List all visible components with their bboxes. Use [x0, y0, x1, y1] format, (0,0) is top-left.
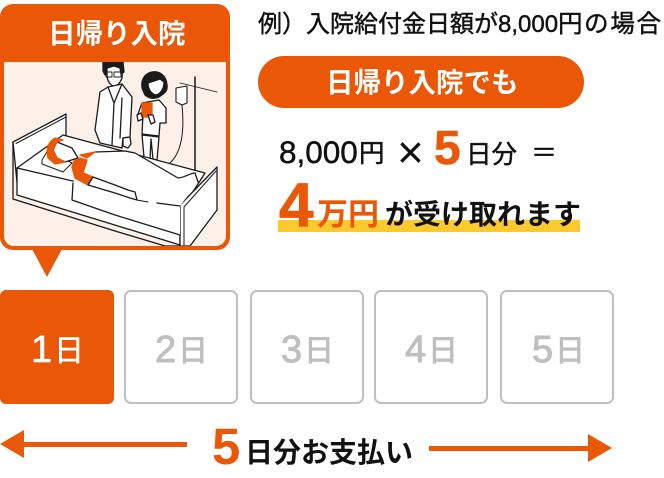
pill label — [258, 56, 584, 108]
day 5 box — [501, 291, 613, 403]
day 3 box: 日 — [304, 335, 334, 368]
calculation formula: 円 — [359, 140, 385, 168]
payment label: 5 — [212, 418, 240, 475]
right arrow — [429, 434, 612, 462]
illustration background — [4, 62, 226, 246]
pill label: 日帰り入院でも — [326, 67, 518, 98]
day 1 box: 日 — [54, 335, 84, 368]
day 2 box: 日 — [178, 335, 208, 368]
day 5 box: 日 — [555, 335, 585, 368]
result: 40,000 yen: 4 — [279, 171, 314, 240]
example condition text — [258, 10, 661, 38]
calculation formula — [279, 122, 557, 178]
day 4 box: 4 — [405, 329, 426, 371]
result: 40,000 yen: 万円 — [317, 197, 379, 232]
nurse — [137, 72, 167, 160]
example condition text: 円の場合 — [558, 10, 661, 38]
day 3 box: 3 — [281, 329, 302, 371]
calculation formula: 5 — [434, 122, 461, 175]
example condition text: 例）入院給付金日額が — [258, 11, 498, 38]
example condition text: 8,000 — [498, 11, 558, 38]
speech pointer — [32, 249, 62, 277]
hair — [47, 138, 65, 164]
day 2 box: 2 — [155, 329, 176, 371]
shirt — [72, 158, 93, 185]
calculation formula: 8,000 — [279, 134, 358, 170]
card heading: 日帰り入院 — [48, 18, 186, 49]
yellow underline — [278, 220, 580, 232]
result: 40,000 yen — [278, 171, 581, 240]
pillow — [42, 150, 72, 172]
payment label — [212, 418, 413, 475]
day 5 box: 5 — [532, 329, 553, 371]
blanket — [74, 152, 188, 234]
arm and hand — [88, 177, 137, 200]
day 3 box — [251, 291, 363, 403]
day 1 box — [0, 290, 114, 404]
card frame — [0, 4, 230, 250]
day 1 box: 1 — [31, 329, 52, 371]
day 4 box — [375, 291, 487, 403]
doctor — [95, 62, 132, 148]
patient — [42, 138, 148, 202]
payment label: 日分お支払い — [245, 437, 413, 468]
result: 40,000 yen: が受け取れます — [385, 198, 581, 230]
bed — [13, 114, 217, 246]
calculation formula: × — [397, 126, 424, 178]
calculation formula: 日分 — [466, 141, 517, 169]
day 2 box — [125, 291, 237, 403]
day 4 box: 日 — [428, 335, 458, 368]
face — [53, 142, 78, 162]
calculation formula: ＝ — [531, 138, 557, 168]
IV drip stand — [170, 77, 217, 172]
panel: day-trip hospitalization card — [0, 4, 230, 277]
illustration: patient in bed with doctor and nurse — [13, 62, 217, 246]
left arrow — [0, 430, 187, 458]
